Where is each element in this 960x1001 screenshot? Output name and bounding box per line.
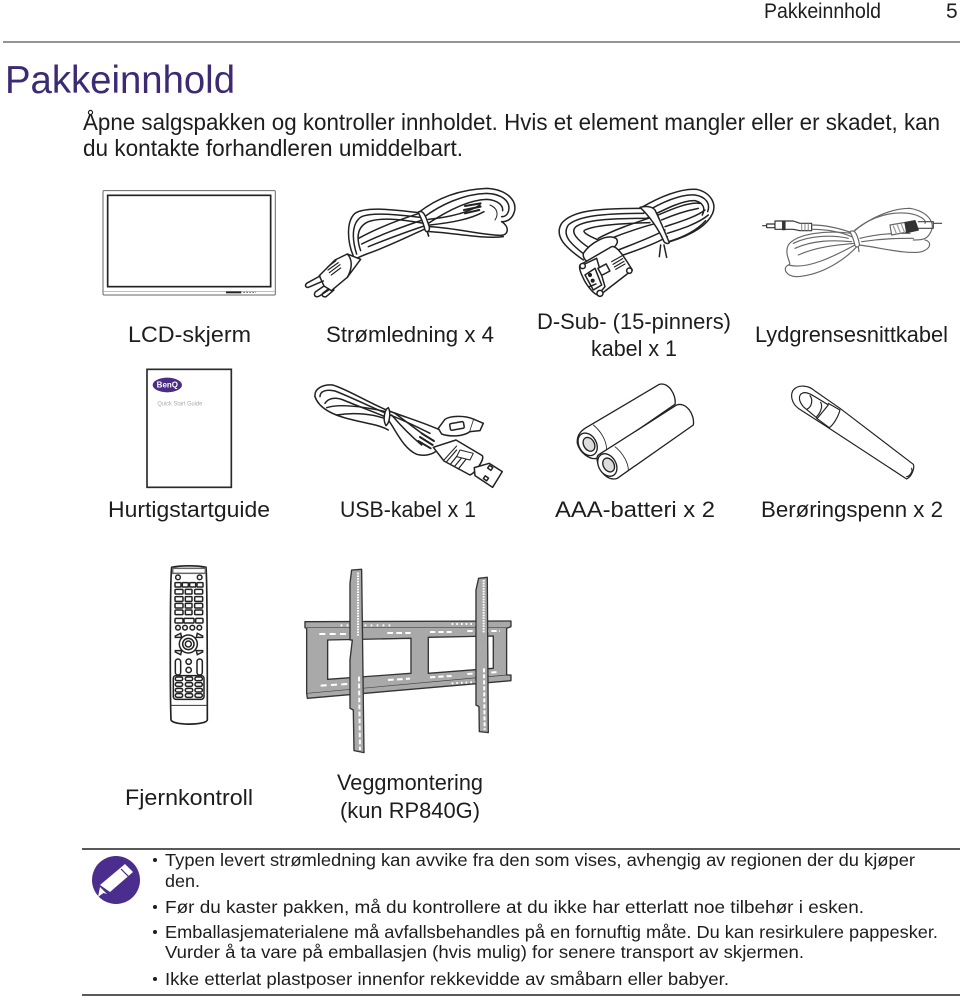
icon: LCD monitor <box>103 191 275 295</box>
title: Pakkeinnhold <box>5 59 235 102</box>
running header <box>764 0 958 23</box>
icon: D-Sub cable <box>559 189 714 296</box>
icon: AAA batteries <box>574 384 694 480</box>
intro text <box>83 108 940 161</box>
label: Berøringspenn x 2: Berøringspenn x 2 <box>761 497 943 522</box>
icon: quick start guide: Quick Start Guide <box>157 402 203 408</box>
icon: wall mount <box>305 569 511 753</box>
intro text: Åpne salgspakken og kontroller innholdet. Hvis et element mangler eller er skadet, kan <box>83 108 940 135</box>
label: Strømledning x 4: Strømledning x 4 <box>326 322 494 347</box>
label: USB-kabel x 1: USB-kabel x 1 <box>340 497 476 522</box>
icon: power cord <box>306 188 515 297</box>
label: D-Sub cable: kabel x 1 <box>591 336 677 361</box>
icon: quick start guide <box>147 369 231 487</box>
label: Fjernkontroll: Fjernkontroll <box>125 785 253 810</box>
icon: touch pen <box>792 386 914 479</box>
icon: quick start guide: BenQ <box>157 381 178 390</box>
label: LCD-skjerm: LCD-skjerm <box>128 322 251 347</box>
label: D-Sub cable: D-Sub- (15-pinners) <box>537 309 731 334</box>
label: Veggmontering: Veggmontering <box>337 770 483 795</box>
icon: audio cable <box>763 208 942 277</box>
label: Veggmontering <box>337 770 483 823</box>
icon: USB cable <box>315 385 502 487</box>
notes list: Emballasjematerialene må avfallsbehandles på en fornuftig måte. Du kan resirkulere pappesker. <box>165 922 938 942</box>
icon: remote control <box>170 566 207 724</box>
label: Veggmontering: (kun RP840G) <box>340 798 480 823</box>
icon: note pencil <box>92 856 140 904</box>
notes list: den. <box>165 871 200 891</box>
label: AAA-batteri x 2: AAA-batteri x 2 <box>555 497 715 522</box>
intro text: du kontakte forhandleren umiddelbart. <box>83 135 463 161</box>
notes list: Vurder å ta vare på emballasjen (hvis mulig) for senere transport av skjermen. <box>165 942 804 962</box>
notes list: Typen levert strømledning kan avvike fra den som vises, avhengig av regionen der du kjøper <box>165 850 915 870</box>
running header: Pakkeinnhold <box>764 0 881 23</box>
label: Lydgrensesnittkabel: Lydgrensesnittkabel <box>755 322 948 347</box>
running header: 5 <box>946 0 958 23</box>
notes list <box>153 850 938 989</box>
notes list: Ikke etterlat plastposer innenfor rekkevidde av småbarn eller babyer. <box>165 969 729 989</box>
label: Hurtigstartguide: Hurtigstartguide <box>108 497 270 522</box>
notes list: Før du kaster pakken, må du kontrollere at du ikke har etterlatt noe tilbehør i esken. <box>165 897 864 917</box>
label: D-Sub cable <box>537 309 731 361</box>
